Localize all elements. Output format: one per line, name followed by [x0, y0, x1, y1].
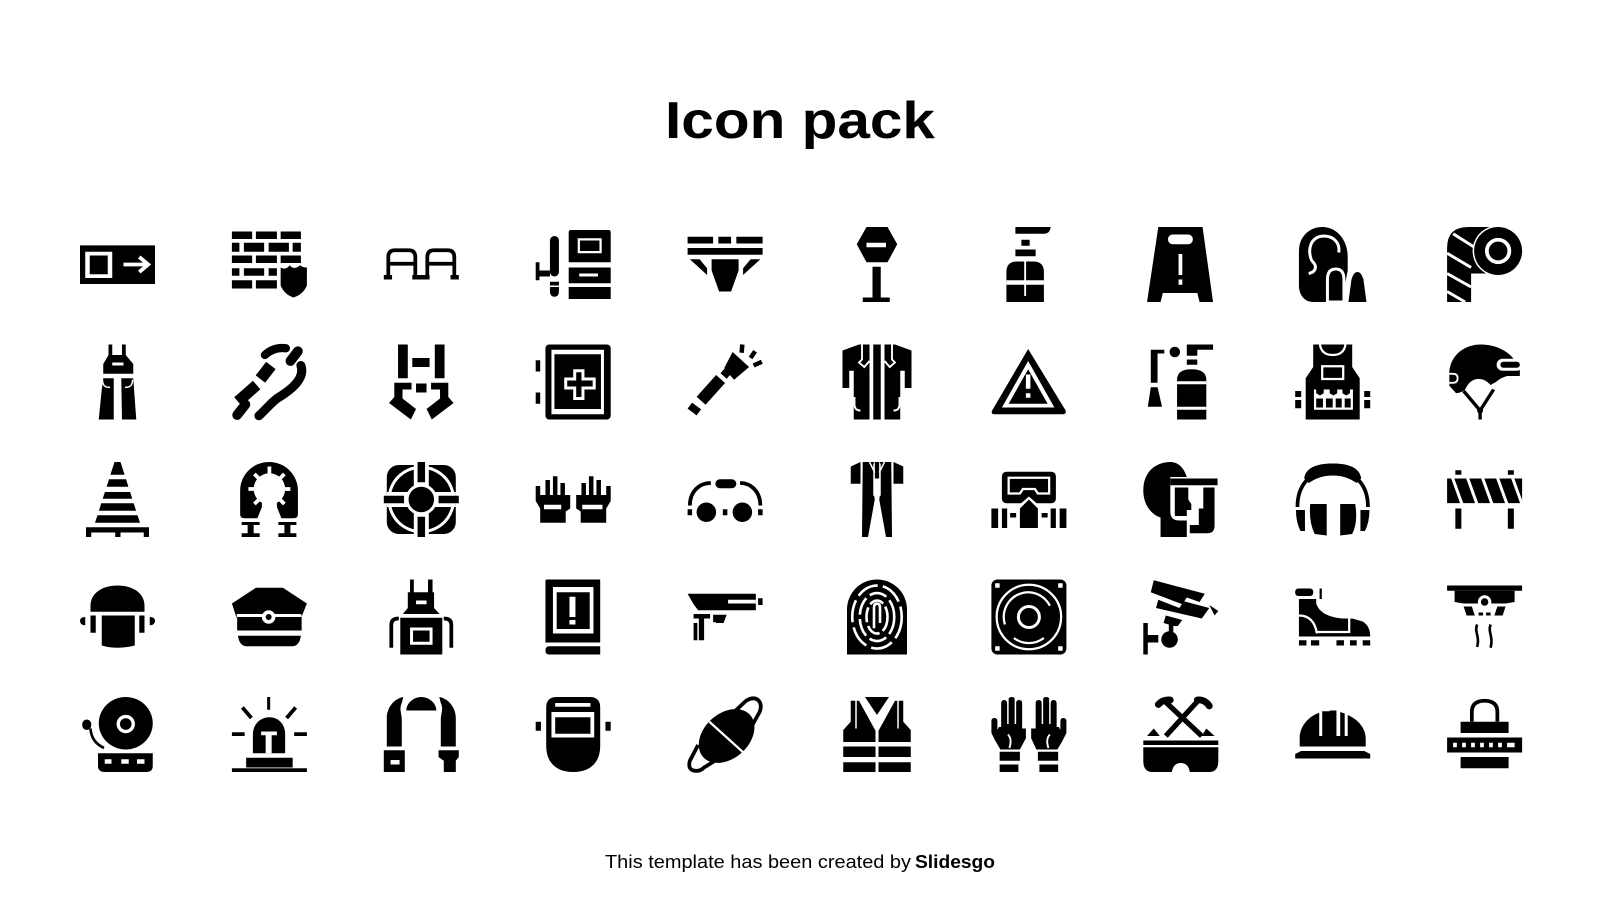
icon: welding mask	[536, 697, 611, 772]
icon: horseshoe float	[240, 462, 298, 537]
icon: safety boot	[1295, 588, 1370, 646]
icon: fire extinguisher	[1148, 344, 1213, 420]
icon: overalls	[99, 344, 136, 420]
icon: apron	[391, 580, 451, 654]
icon: face mask	[688, 698, 765, 774]
icon: fingerprint	[847, 580, 907, 654]
icon: padlock bag	[1447, 701, 1522, 768]
icon: hard hat	[1295, 710, 1370, 758]
icon: alarm bell	[82, 697, 153, 772]
icon: tactical vest	[1295, 344, 1370, 420]
icon: traffic cone	[86, 462, 149, 537]
icon: gas mask	[991, 472, 1066, 530]
icon: bike helmet	[1449, 344, 1523, 420]
icon: road barricade	[1447, 470, 1524, 529]
icon: fuel pump	[536, 230, 611, 299]
icon: long rubber gloves	[991, 697, 1066, 772]
icon: reflective vest	[843, 697, 911, 772]
icon: life buoy	[384, 462, 459, 537]
icon: coverall suit	[851, 462, 903, 537]
icon: siren light	[232, 697, 307, 772]
icon: lab coat	[842, 344, 912, 420]
icon: handgun	[688, 594, 763, 640]
icon: soap dispenser	[1006, 227, 1051, 302]
icon: head guard	[80, 586, 155, 648]
icon: brick wall with shield	[232, 232, 307, 298]
icon: first aid cabinet	[536, 344, 611, 420]
footer credit: Slidesgo	[915, 852, 995, 872]
icon: smoke detector	[1447, 586, 1522, 648]
icon: wet floor sign	[1147, 227, 1213, 302]
icon: barriers	[384, 250, 459, 280]
icon: athletic support	[688, 237, 763, 292]
footer credit: This template has been created by	[605, 852, 911, 872]
icon: ear muffs	[1296, 464, 1369, 536]
icon: security camera	[1143, 580, 1218, 654]
icon: tape roll	[1447, 226, 1524, 302]
icon: ear protection	[1299, 227, 1366, 302]
icon: speaker	[991, 580, 1066, 654]
icon: flashlight	[692, 344, 762, 412]
icon: safety manual	[545, 580, 600, 654]
icon: work gloves	[536, 476, 611, 523]
icon: exit sign	[80, 245, 155, 284]
title: Icon pack	[665, 92, 935, 150]
icon: lifting sling	[384, 697, 459, 772]
icon: warning triangle	[992, 349, 1066, 414]
icon: stop sign post	[857, 227, 897, 302]
icon: safety glasses	[688, 479, 763, 522]
icon: carabiner hose	[237, 348, 302, 416]
icon: police cap	[232, 588, 307, 646]
icon: face shield	[1143, 462, 1218, 537]
icon: tools with goggles	[1143, 700, 1218, 772]
icon: safety harness	[389, 344, 454, 420]
